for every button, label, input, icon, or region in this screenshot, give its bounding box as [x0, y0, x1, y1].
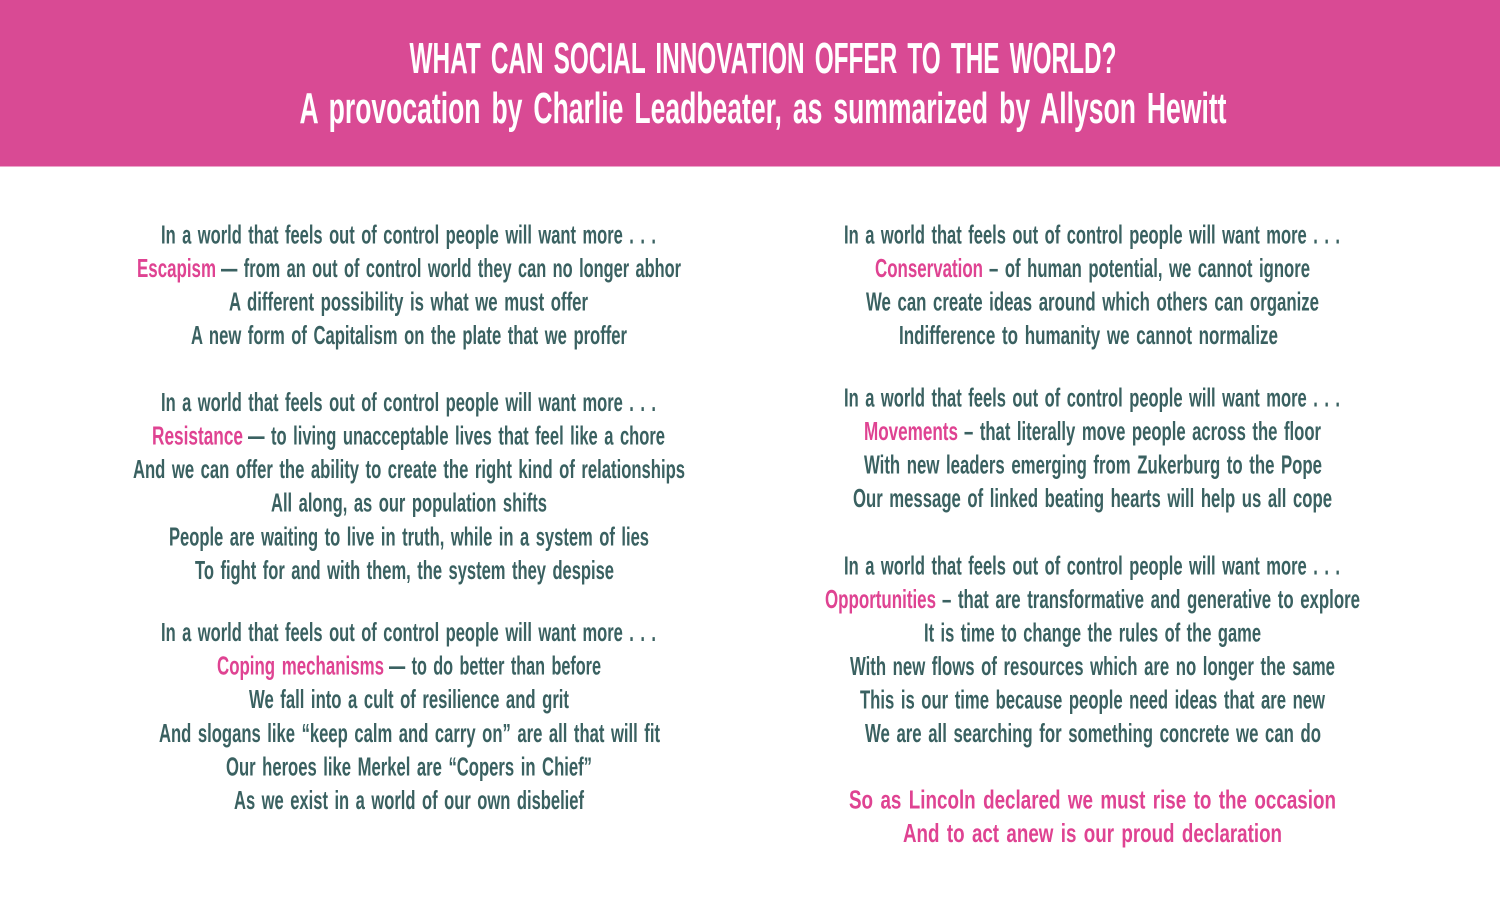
- stanza: resistance: And we can offer the ability to create the right kind of relationships: [133, 454, 685, 484]
- stanza: opportunities: Opportunities: [825, 584, 936, 614]
- stanza: resistance: All along, as our population shifts: [271, 488, 547, 518]
- closing statement: [849, 784, 1336, 848]
- stanza: movements: Movements: [864, 416, 958, 446]
- right column: [825, 220, 1360, 848]
- stanza: resistance: [133, 387, 685, 585]
- stanza: escapism: In a world that feels out of control people will want more . . .: [161, 220, 656, 250]
- stanza: coping mechanisms: [159, 617, 660, 815]
- stanza: coping mechanisms: We fall into a cult of resilience and grit: [249, 684, 569, 714]
- stanza: resistance: To fight for and with them, the system they despise: [195, 555, 614, 585]
- stanza: escapism: Escapism: [137, 253, 216, 283]
- stanza: conservation: Indifference to humanity we cannot normalize: [899, 320, 1278, 350]
- stanza: opportunities: It is time to change the rules of the game: [924, 617, 1261, 647]
- stanza: resistance: In a world that feels out of control people will want more . . .: [161, 387, 656, 417]
- stanza: conservation: Conservation: [875, 253, 983, 283]
- stanza: resistance: Resistance: [152, 421, 243, 451]
- stanza: coping mechanisms: In a world that feels out of control people will want more . . .: [161, 617, 656, 647]
- stanza: coping mechanisms: Our heroes like Merkel are “Copers in Chief”: [226, 751, 592, 781]
- stanza: escapism: — from an out of control world they can no longer abhor: [221, 253, 681, 283]
- stanza: resistance: People are waiting to live in truth, while in a system of lies: [169, 521, 649, 551]
- stanza: conservation: [844, 220, 1340, 350]
- stanza: conservation: – of human potential, we cannot ignore: [989, 253, 1310, 283]
- header banner: [0, 0, 1500, 166]
- stanza: escapism: A different possibility is what we must offer: [229, 286, 588, 316]
- stanza: coping mechanisms: Coping mechanisms: [217, 651, 384, 681]
- stanza: coping mechanisms: And slogans like “keep calm and carry on” are all that will fit: [159, 718, 660, 748]
- stanza: escapism: [137, 220, 681, 350]
- closing statement: And to act anew is our proud declaration: [903, 818, 1282, 848]
- stanza: movements: [844, 382, 1340, 513]
- stanza: coping mechanisms: As we exist in a world of our own disbelief: [234, 785, 584, 815]
- stanza: escapism: A new form of Capitalism on the plate that we proffer: [191, 320, 627, 350]
- stanza: opportunities: [825, 550, 1360, 748]
- stanza: resistance: — to living unacceptable lives that feel like a chore: [248, 421, 665, 451]
- stanza: coping mechanisms: — to do better than before: [389, 651, 601, 681]
- left column: [133, 220, 685, 815]
